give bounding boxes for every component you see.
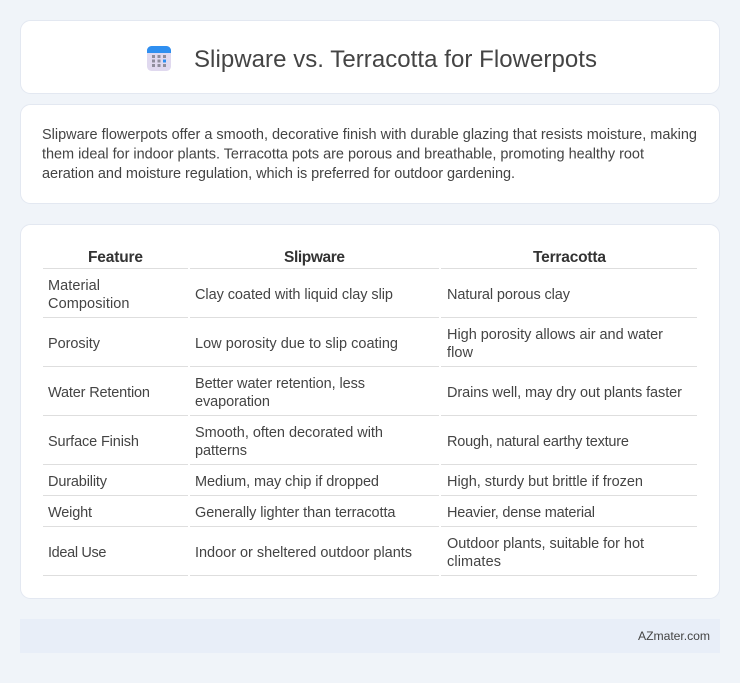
row: ideal use: climates <box>447 554 501 570</box>
row: porosity <box>48 327 663 361</box>
row: porosity: flow <box>447 345 474 361</box>
row: weight: Heavier, dense material <box>447 505 595 521</box>
row: surface finish: Surface Finish <box>48 434 139 450</box>
row: weight: Generally lighter than terracotta <box>195 505 396 521</box>
row: ideal use: Ideal Use <box>48 545 106 561</box>
row: water retention: Drains well, may dry out plants faster <box>447 385 682 401</box>
row: water retention: Better water retention, less <box>195 376 365 392</box>
row: material composition: Natural porous clay <box>447 287 571 303</box>
table header row: Slipware <box>284 249 345 266</box>
table header row <box>88 249 606 266</box>
row: weight <box>48 505 595 521</box>
row: durability: High, sturdy but brittle if frozen <box>447 474 643 490</box>
table header row: Feature <box>88 249 143 266</box>
row: material composition <box>48 278 571 312</box>
footer bar <box>20 619 720 653</box>
footer credit: AZmater.com <box>638 629 710 643</box>
row: water retention: evaporation <box>195 394 270 410</box>
row: durability: Medium, may chip if dropped <box>195 474 379 490</box>
row: durability: Durability <box>48 474 108 490</box>
panel: description <box>20 104 720 204</box>
text block: description: them ideal for indoor plants. Terracotta pots are porous and breathable, promoting healthy root <box>42 146 644 162</box>
row: material composition: Composition <box>48 296 130 312</box>
row: material composition: Material <box>48 278 100 294</box>
table header row: Terracotta <box>533 249 606 266</box>
row: material composition: Clay coated with liquid clay slip <box>195 287 393 303</box>
row: surface finish: Rough, natural earthy texture <box>447 434 629 450</box>
row: water retention <box>48 376 682 410</box>
row: porosity: Low porosity due to slip coating <box>195 336 398 352</box>
text block: description <box>42 127 697 182</box>
panel: comparison table <box>20 224 720 598</box>
row: ideal use: Outdoor plants, suitable for hot <box>447 536 644 552</box>
row: surface finish <box>48 425 629 459</box>
row: surface finish: Smooth, often decorated with <box>195 425 383 441</box>
icon: calendar <box>147 46 171 71</box>
row: surface finish: patterns <box>195 443 247 459</box>
text block: description: Slipware flowerpots offer a smooth, decorative finish with durable glazing that resists moisture, making <box>42 127 697 143</box>
panel: title card <box>20 20 720 94</box>
text block: description: aeration and moisture regulation, which is preferred for outdoor gardening. <box>42 166 515 182</box>
row: ideal use: Indoor or sheltered outdoor plants <box>195 545 412 561</box>
row: porosity: High porosity allows air and water <box>447 327 663 343</box>
title: Slipware vs. Terracotta for Flowerpots <box>194 46 597 73</box>
row: ideal use <box>48 536 644 570</box>
row: weight: Weight <box>48 505 92 521</box>
row: porosity: Porosity <box>48 336 101 352</box>
row: water retention: Water Retention <box>48 385 150 401</box>
row: durability <box>48 474 643 490</box>
